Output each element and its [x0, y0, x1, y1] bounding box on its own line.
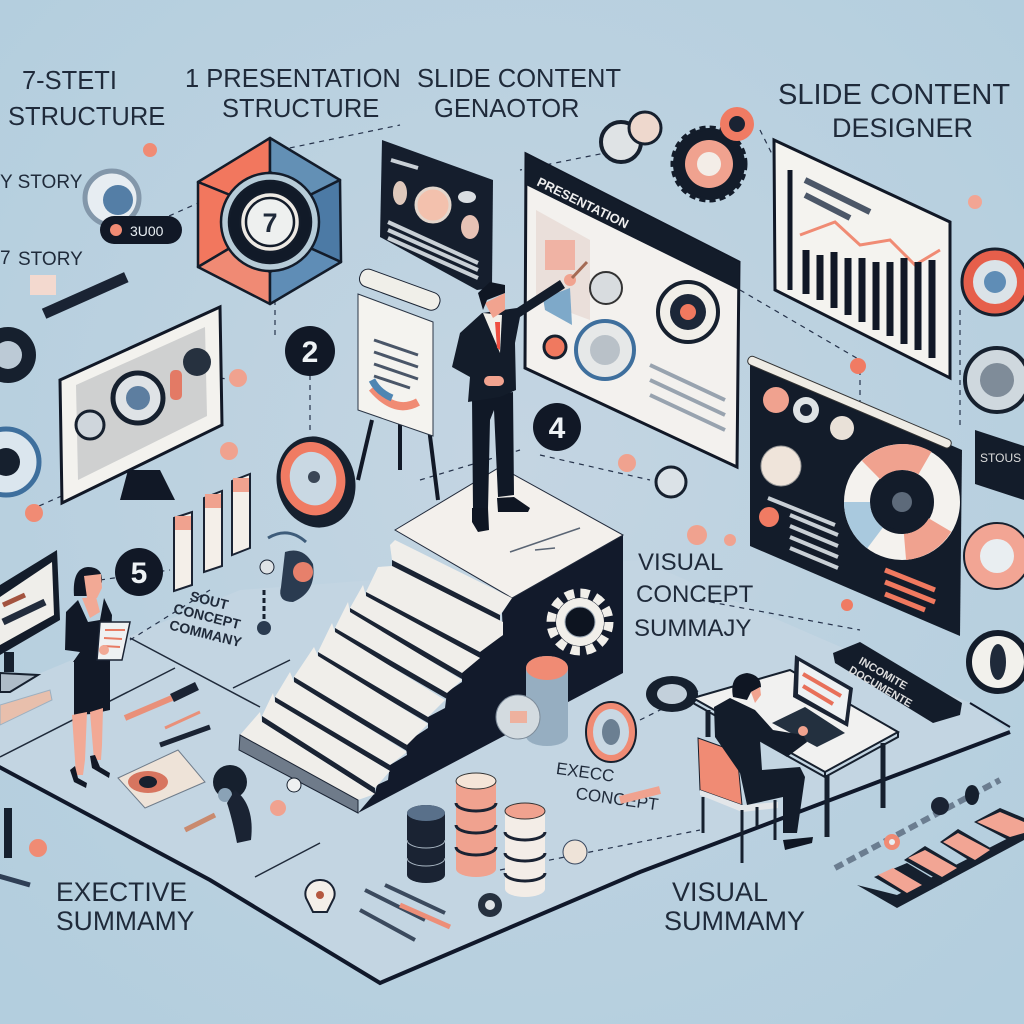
staircase [239, 467, 623, 813]
small caption: SOUT [188, 588, 230, 613]
line and bar chart panel [774, 140, 950, 378]
label plate: DOCUMENTE [846, 664, 914, 710]
target icon [266, 427, 366, 537]
large presentation screen [525, 154, 739, 467]
left edge icons [0, 327, 43, 522]
target icon: bottom centre [586, 676, 698, 762]
story labels: Y STORY [0, 172, 83, 193]
heading: executive summary [56, 877, 195, 936]
heading: visual concept summary: VISUAL [638, 549, 723, 576]
figure: presenter on podium [452, 262, 587, 532]
heading: executive summary: SUMMAMY [56, 906, 195, 936]
title: 7-step structure: STRUCTURE [8, 103, 165, 131]
icon: gear on staircase [551, 593, 609, 651]
number badge 5: 5 [131, 557, 147, 590]
platform floor [0, 560, 1010, 983]
icon: story toggle: 3U00 [130, 223, 164, 239]
story labels: STORY [18, 249, 83, 270]
figure: standing woman [65, 567, 130, 788]
title: presentation structure: STRUCTURE [222, 95, 379, 123]
story labels [0, 172, 83, 270]
number badge 2 [285, 326, 335, 376]
stacked cylinders [407, 773, 545, 897]
title: presentation structure: 1 PRESENTATION [185, 65, 401, 93]
left monitor, cropped [0, 550, 60, 725]
small caption: CONCEPT [172, 600, 243, 632]
title: slide content generator: SLIDE CONTENT [417, 65, 621, 93]
label: exec concept [552, 759, 663, 814]
heading: visual summary: SUMMAMY [664, 906, 805, 936]
dark slide: top centre [380, 140, 493, 290]
hexagon tool icon [257, 533, 314, 635]
label plate: INCOMITE [856, 655, 909, 692]
small round icons centre [220, 358, 866, 611]
hexagon chart: 7 [198, 138, 341, 304]
dark dashboard panel [746, 355, 962, 636]
flip chart [357, 267, 442, 500]
title: presentation structure [185, 65, 401, 123]
small desk items [0, 686, 301, 885]
icon: story toggle [30, 143, 182, 319]
small caption [168, 585, 252, 650]
title: slide content generator: GENAOTOR [434, 95, 579, 123]
gear icons: top [601, 107, 754, 200]
desk and seated worker [693, 655, 898, 863]
title: 7-step structure: 7-STETI [22, 67, 117, 95]
hexagon chart: 7: 7 [262, 208, 278, 238]
label: exec concept: CONCEPT [575, 784, 660, 814]
large presentation screen: PRESENTATION [535, 174, 631, 231]
heading: visual concept summary [634, 549, 754, 642]
number badge 4 [533, 403, 581, 451]
heading: visual summary: VISUAL [672, 877, 768, 907]
title: slide content designer: DESIGNER [832, 113, 973, 143]
label: exec concept: EXECC [555, 759, 616, 786]
monitor: left [60, 307, 222, 503]
title: slide content generator [417, 65, 621, 123]
story labels: 7 [0, 248, 11, 269]
title: slide content designer: SLIDE CONTENT [778, 79, 1010, 111]
mini bars [174, 474, 250, 591]
timeline strip [835, 780, 1024, 908]
heading: visual concept summary: SUMMAJY [634, 615, 751, 642]
heading: visual summary [664, 877, 805, 936]
right edge icons [962, 195, 1024, 691]
title: slide content designer [778, 79, 1010, 143]
right edge icons: STOUS [980, 451, 1021, 465]
small caption: COMMANY [168, 617, 244, 650]
number badge 5 [115, 548, 163, 596]
heading: executive summary: EXECTIVE [56, 877, 187, 907]
title: 7-step structure [8, 67, 165, 131]
heading: visual concept summary: CONCEPT [636, 581, 754, 608]
cylinder: coral and grey [496, 656, 568, 746]
number badge 4: 4 [549, 412, 566, 445]
lightbulb and tools [305, 790, 660, 940]
number badge 2: 2 [302, 336, 318, 369]
label plate [833, 642, 962, 723]
